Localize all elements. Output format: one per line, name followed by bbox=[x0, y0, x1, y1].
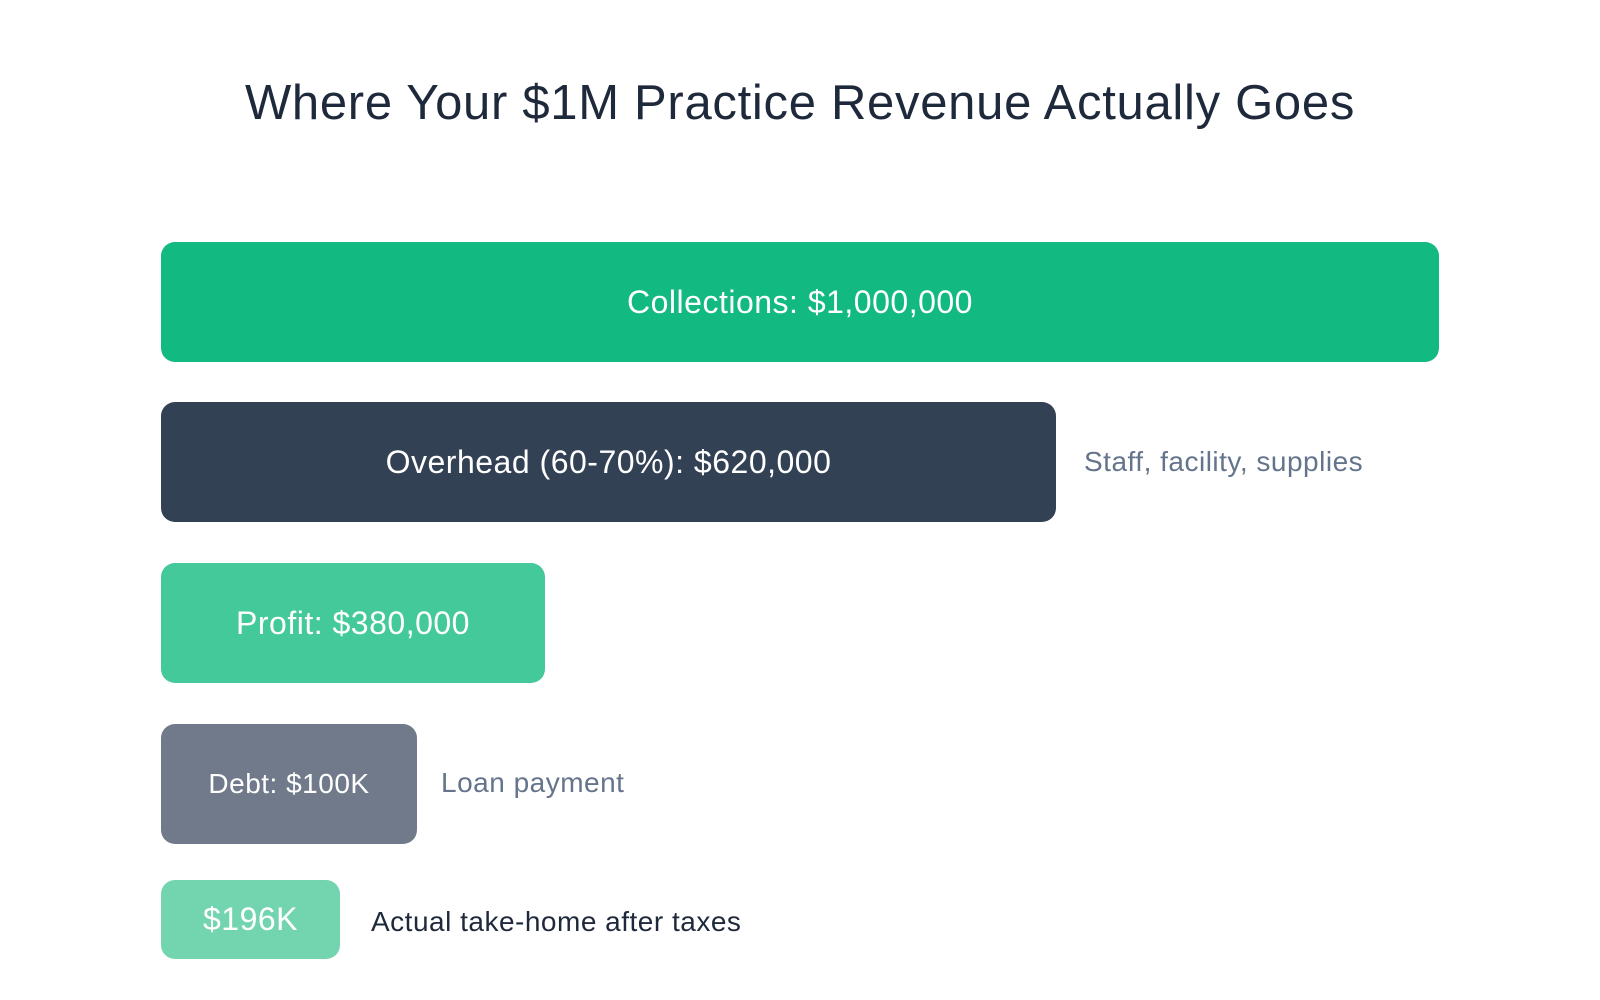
bar: profit bbox=[161, 563, 545, 683]
bar: take-home: $196K bbox=[203, 901, 298, 937]
label: debt note: Loan payment bbox=[441, 767, 624, 798]
bar: collections bbox=[161, 242, 1439, 362]
bar: overhead bbox=[161, 402, 1056, 522]
bar: profit: Profit: $380,000 bbox=[236, 604, 470, 640]
bar: collections: Collections: $1,000,000 bbox=[627, 284, 973, 320]
title: Where Your $1M Practice Revenue Actually Goes bbox=[245, 76, 1355, 130]
label: overhead note: Staff, facility, supplies bbox=[1084, 446, 1363, 477]
bar: take-home bbox=[161, 880, 340, 959]
bar: debt: Debt: $100K bbox=[208, 768, 370, 799]
bar: debt bbox=[161, 724, 417, 844]
label: take-home note: Actual take-home after taxes bbox=[371, 906, 741, 937]
bar: overhead: Overhead (60-70%): $620,000 bbox=[386, 444, 831, 480]
